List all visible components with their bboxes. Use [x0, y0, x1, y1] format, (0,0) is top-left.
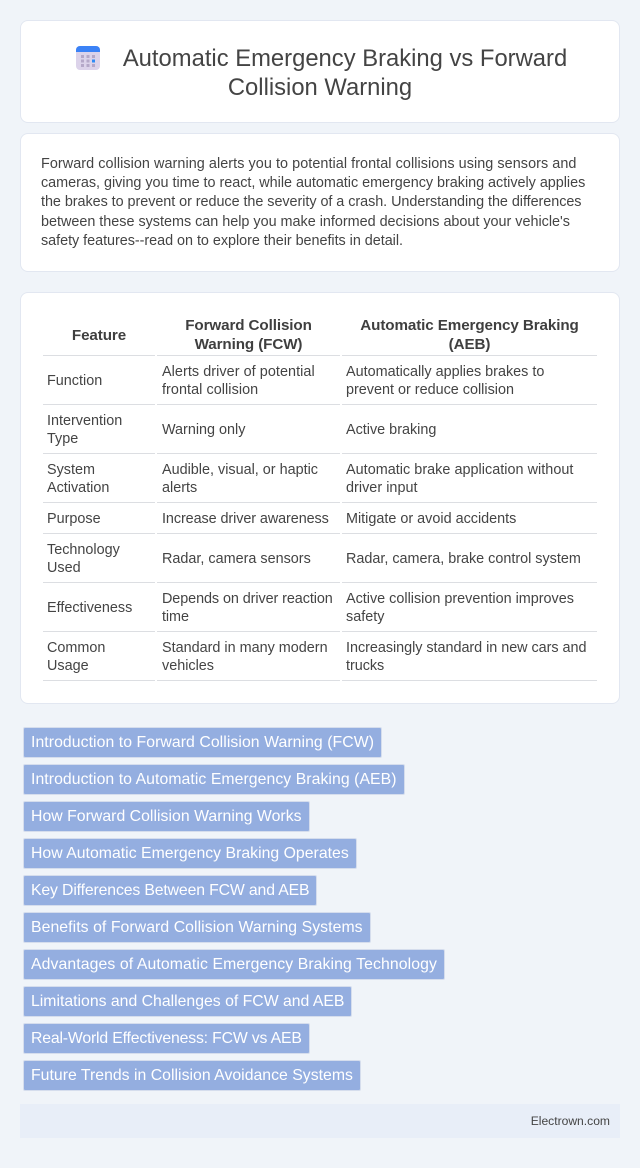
- topic link 3: How Forward Collision Warning Works: [31, 808, 302, 825]
- Purpose AEB: Mitigate or avoid accidents: [346, 511, 516, 527]
- table header: AEB: (AEB): [449, 336, 490, 353]
- intro paragraph: between these systems can help you make informed decisions about your vehicle's: [41, 214, 570, 230]
- title: [123, 45, 567, 101]
- Activation AEB: Automatic brake application without: [346, 462, 573, 478]
- Effectiveness AEB: safety: [346, 609, 384, 625]
- topic link 3: [23, 801, 310, 832]
- row: Function: Function: [47, 373, 102, 389]
- title: Automatic Emergency Braking vs Forward: [123, 45, 567, 72]
- Effectiveness AEB: Active collision prevention improves: [346, 591, 574, 607]
- table header: FCW: Forward Collision: [185, 317, 312, 334]
- topic link 6: Benefits of Forward Collision Warning Systems: [31, 919, 363, 936]
- topic link 6: [23, 912, 371, 943]
- comparison table card: [20, 292, 620, 704]
- intro paragraph: cameras, giving you time to react, while automatic emergency braking actively applies: [41, 175, 585, 191]
- Technology AEB: Radar, camera, brake control system: [346, 551, 581, 567]
- Function AEB: Automatically applies brakes to: [346, 364, 544, 380]
- intro card: [20, 133, 620, 272]
- Function FCW: Alerts driver of potential: [162, 364, 315, 380]
- title: Collision Warning: [228, 74, 412, 101]
- intro paragraph: safety features--read on to explore their benefits in detail.: [41, 233, 403, 249]
- Usage FCW: Standard in many modern: [162, 640, 328, 656]
- topic link 1: [23, 727, 382, 758]
- Intervention FCW: Warning only: [162, 422, 245, 438]
- topic link 10: [23, 1060, 361, 1091]
- row: Common Usage: [47, 640, 105, 674]
- topic link 2: [23, 764, 405, 795]
- topic link 7: Advantages of Automatic Emergency Braking Technology: [31, 956, 437, 973]
- Usage FCW: vehicles: [162, 658, 214, 674]
- row: Technology Used: Used: [47, 560, 81, 576]
- topic link 1: Introduction to Forward Collision Warning (FCW): [31, 734, 374, 751]
- intro paragraph: Forward collision warning alerts you to potential frontal collisions using sensors and: [41, 156, 576, 172]
- topic link 8: Limitations and Challenges of FCW and AEB: [31, 993, 344, 1010]
- row: Technology Used: [47, 542, 120, 576]
- table header: Feature: Feature: [72, 327, 126, 344]
- topic link 10: Future Trends in Collision Avoidance Systems: [31, 1067, 353, 1084]
- icon: calendar: [76, 46, 100, 70]
- intro paragraph: the brakes to prevent or reduce the severity of a crash. Understanding the differences: [41, 194, 581, 210]
- topic link 2: Introduction to Automatic Emergency Braking (AEB): [31, 771, 397, 788]
- Effectiveness FCW: Depends on driver reaction: [162, 591, 333, 607]
- Function AEB: [346, 364, 544, 398]
- row: System Activation: System: [47, 462, 95, 478]
- Purpose FCW: Increase driver awareness: [162, 511, 329, 527]
- Activation FCW: Audible, visual, or haptic: [162, 462, 318, 478]
- table header: AEB: Automatic Emergency Braking: [360, 317, 579, 334]
- topic link 4: How Automatic Emergency Braking Operates: [31, 845, 349, 862]
- Function AEB: prevent or reduce collision: [346, 382, 514, 398]
- Activation AEB: [346, 462, 574, 496]
- topic link 8: [23, 986, 352, 1017]
- topic link 9: Real-World Effectiveness: FCW vs AEB: [31, 1030, 302, 1047]
- footer: [20, 1104, 620, 1138]
- Activation AEB: driver input: [346, 480, 418, 496]
- Effectiveness FCW: time: [162, 609, 189, 625]
- topic link 7: [23, 949, 445, 980]
- row: Intervention Type: [47, 413, 122, 447]
- intro paragraph: [41, 156, 585, 249]
- table header: FCW: [185, 317, 312, 353]
- Effectiveness AEB: [346, 591, 574, 625]
- header card: [20, 20, 620, 123]
- row: Technology Used: Technology: [47, 542, 120, 558]
- row: Common Usage: Usage: [47, 658, 89, 674]
- Function FCW: [162, 364, 315, 398]
- Usage FCW: [162, 640, 328, 674]
- Function FCW: frontal collision: [162, 382, 258, 398]
- table header: AEB: [360, 317, 579, 353]
- row: Purpose: Purpose: [47, 511, 101, 527]
- row: Intervention Type: Intervention: [47, 413, 122, 429]
- Usage AEB: [346, 640, 586, 674]
- row: Common Usage: Common: [47, 640, 105, 656]
- Activation FCW: [162, 462, 318, 496]
- Activation FCW: alerts: [162, 480, 197, 496]
- topic link 9: [23, 1023, 310, 1054]
- row: Intervention Type: Type: [47, 431, 78, 447]
- topic link 5: [23, 875, 317, 906]
- table header: FCW: Warning (FCW): [195, 336, 302, 353]
- topic link 5: Key Differences Between FCW and AEB: [31, 882, 309, 899]
- Technology FCW: Radar, camera sensors: [162, 551, 311, 567]
- row: Effectiveness: Effectiveness: [47, 600, 132, 616]
- Effectiveness FCW: [162, 591, 333, 625]
- Intervention AEB: Active braking: [346, 422, 436, 438]
- row: System Activation: [47, 462, 109, 496]
- Usage AEB: trucks: [346, 658, 384, 674]
- row: System Activation: Activation: [47, 480, 109, 496]
- footer: Electrown.com: [531, 1114, 610, 1128]
- topic link 4: [23, 838, 357, 869]
- Usage AEB: Increasingly standard in new cars and: [346, 640, 586, 656]
